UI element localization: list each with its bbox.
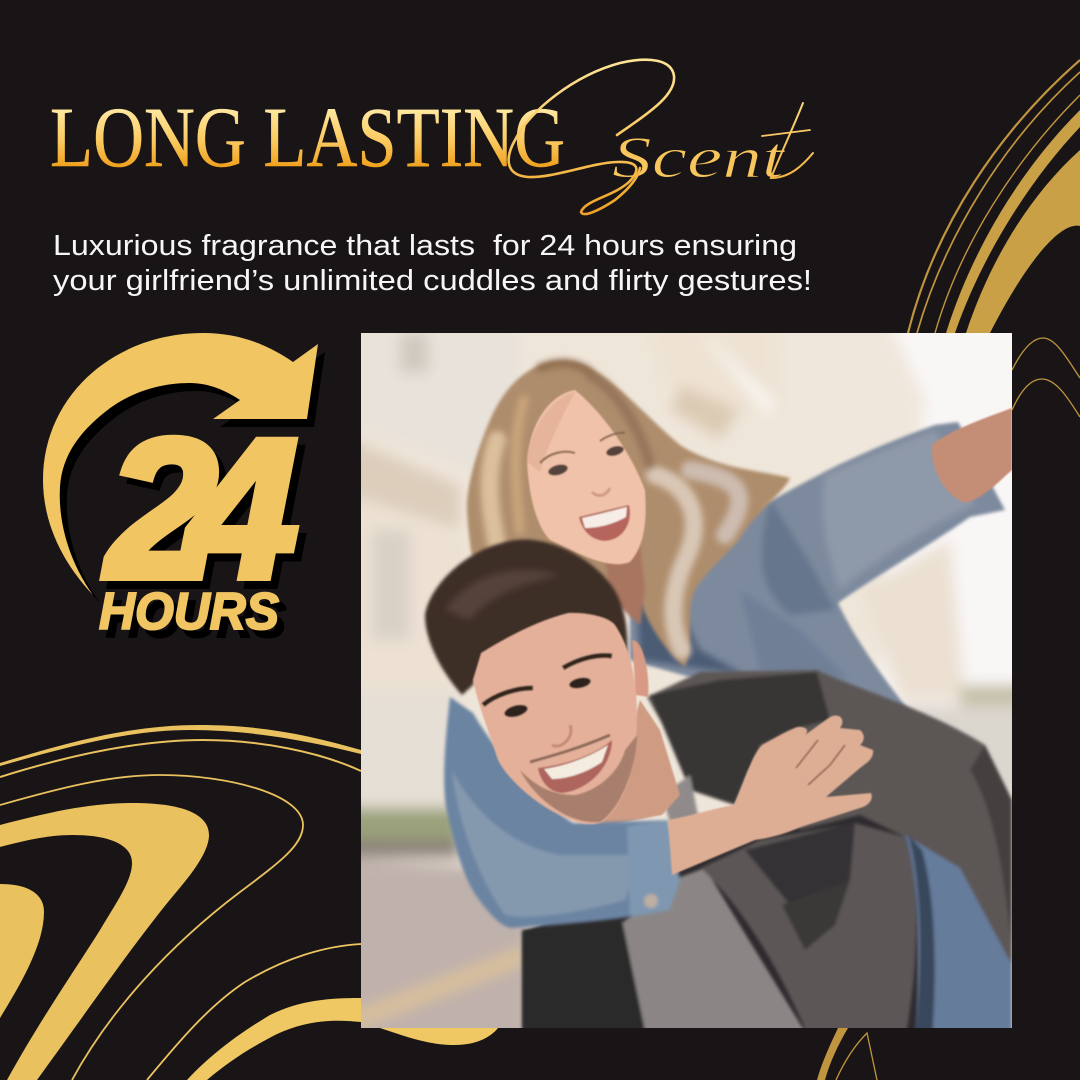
script flourish [509,60,813,214]
photo background: blurred street and buildings [361,333,1012,1028]
man: eyes [504,704,528,718]
woman: forearm and hand [668,715,873,875]
number 24: 2 [103,398,217,619]
script word: scent: Scent [612,125,787,190]
photo: happy couple piggyback [361,333,1012,1028]
badge: 24 hours [43,333,318,641]
man: mouth [538,740,612,793]
man: hair highlight [445,570,560,620]
man: face [473,613,648,824]
subtitle line 2: your girlfriend’s unlimited cuddles and flirty gestures! [53,265,812,297]
icon: circular arrow [43,333,318,595]
man: nose [552,725,571,746]
woman: neck [605,545,645,625]
man: right sleeve and jacket [522,670,1012,1040]
man: denim sleeve around neck [444,697,680,928]
woman: outstretched hand [932,408,1012,503]
woman: mouth [579,505,630,541]
subtitle line 1: Luxurious fragrance that lasts for 24 hours ensuring [53,230,797,262]
number 24: 4 [184,398,298,619]
subtitle [53,230,812,297]
decorative swirl: top right [908,60,1080,417]
woman: eyes [548,464,568,476]
woman: hair highlights [490,363,739,650]
woman: face [527,390,646,564]
man: hair [425,539,627,695]
man: jacket lower front [701,823,916,1040]
woman: jacket shading [635,430,975,680]
woman: denim jacket [630,422,1005,712]
woman: nose [592,488,610,495]
label hours: HOURS [99,583,279,641]
heading: long lasting: LONG LASTING [50,89,565,185]
man: neck [595,700,680,828]
man: t-shirt [620,868,810,1040]
woman: hair back [467,361,790,667]
decorative swirl: bottom right [817,1028,877,1080]
decorative swirl: bottom left [0,725,498,1080]
man: torso base [522,812,920,1028]
title [50,60,813,214]
